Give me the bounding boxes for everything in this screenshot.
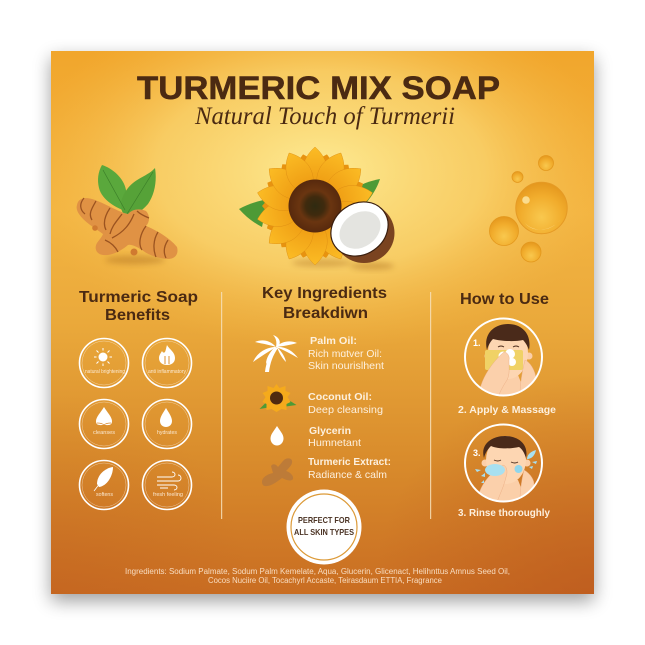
badge: perfect for all skin types [286,490,362,564]
panel shadow [51,58,594,601]
panel: benefits [79,289,198,510]
panel: how to use [458,291,556,519]
heading: benefits [79,289,198,324]
text: palm oil [308,335,384,372]
step 1: apply illustration [465,318,542,400]
benefit: cleanses [80,400,128,448]
title: TURMERIC MIX SOAP [137,70,500,106]
text: coconut oil [308,391,383,416]
benefit: anti inflammatory: anti inflammatory [148,369,186,375]
badge: perfect for all skin types: PERFECT FOR [298,515,350,525]
text: palm oil: Skin nourislhent [308,360,384,372]
icon: palm tree [253,335,298,372]
water splashes [475,450,537,483]
benefit: natural brightening [80,338,128,388]
text: turmeric extract: Radiance & calm [308,469,387,481]
heading: benefits: Turmeric Soap [79,289,198,306]
icon: small sunflower [260,384,296,412]
benefit: fresh feeling: fresh feeling [153,492,183,498]
text: glycerin [308,425,361,449]
benefit: cleanses: cleanses [93,430,116,436]
icon: small turmeric [262,458,293,486]
step 1 caption: 2. Apply & Massage [458,404,556,416]
footer: ingredients list: Ingredients: Sodium Palmate, Sodum Palm Kemelate, Aqua, Glucerin, Glicenact, Helihnttus Amnus Seed Oil, [125,567,510,576]
column divider right [430,292,431,519]
text: coconut oil: Coconut Oil: [308,391,372,403]
infographic canvas [40,46,606,612]
benefit: natural brightening: natural brightening [85,369,125,375]
heading: key ingredients: Breakdiwn [283,305,368,322]
panel: key ingredients [253,285,391,564]
heading: key ingredients: Key Ingredients [262,285,387,302]
benefit: softens: softens [96,492,114,498]
text: coconut oil: Deep cleansing [308,404,383,416]
footer: ingredients list [125,567,510,585]
text: palm oil: Palm Oil: [310,335,357,347]
illustration: golden oil bubbles [490,156,567,262]
poster background [51,51,594,594]
icon: glycerin drop [270,426,284,446]
text: glycerin: Humnetant [308,437,361,449]
benefit: hydrates [142,400,192,448]
text: palm oil: Rich mɑtver Oil: [308,348,382,360]
text: glycerin: Glycerin [309,425,351,437]
footer: ingredients list: Cocos Nuciire Oil, Tocachyrl Accaste, Teirasdaum ETTIA, Fragrance [208,576,443,585]
benefit: hydrates: hydrates [157,430,178,436]
step 2 caption: 3. Rinse thoroughly [458,507,550,519]
subtitle: Natural Touch of Turmerii [194,103,455,130]
benefit: anti inflammatory [142,338,192,388]
text: turmeric extract [308,456,391,481]
illustration: sunflower and coconut [239,147,399,270]
step 1: apply illustration: 1. [473,338,481,348]
step 2: rinse illustration [465,424,542,505]
heading: key ingredients [262,285,387,322]
badge: perfect for all skin types: ALL SKIN TYPES [294,527,354,537]
column divider left [221,292,222,519]
benefit: softens [80,460,128,510]
illustration: turmeric root with leaves [77,165,178,264]
heading: how to use: How to Use [460,291,549,308]
heading: benefits: Benefits [105,307,170,324]
step 2: rinse illustration: 3. [473,448,481,458]
text: turmeric extract: Turmeric Extract: [308,456,391,468]
benefit: fresh feeling [142,460,192,510]
